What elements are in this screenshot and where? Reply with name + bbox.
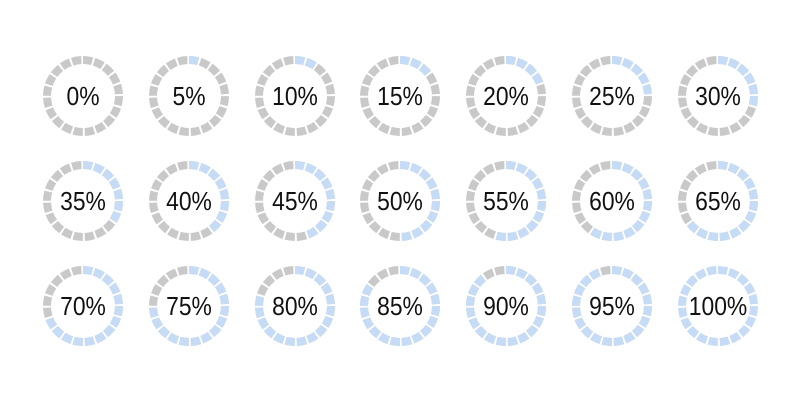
ring 100%	[682, 270, 754, 342]
ring 0%	[47, 60, 119, 132]
ring 80%	[259, 270, 331, 342]
ring 45%: 45%	[272, 188, 318, 216]
ring 50%	[364, 165, 436, 237]
ring 90%: 90%	[483, 293, 529, 321]
ring 65%	[682, 165, 754, 237]
ring 55%	[470, 165, 542, 237]
ring 20%: 20%	[483, 83, 529, 111]
ring 60%: 60%	[589, 188, 635, 216]
ring 95%	[576, 270, 648, 342]
ring 15%	[364, 60, 436, 132]
ring 85%: 85%	[377, 293, 423, 321]
ring 65%: 65%	[695, 188, 741, 216]
ring 60%	[576, 165, 648, 237]
ring 10%: 10%	[272, 83, 318, 111]
ring 10%	[259, 60, 331, 132]
ring 55%: 55%	[483, 188, 529, 216]
ring 25%	[576, 60, 648, 132]
ring 35%	[47, 165, 119, 237]
ring 45%	[259, 165, 331, 237]
ring 30%: 30%	[695, 83, 741, 111]
ring 30%	[682, 60, 754, 132]
ring 25%: 25%	[589, 83, 635, 111]
ring 70%	[47, 270, 119, 342]
ring 50%: 50%	[377, 188, 423, 216]
ring 90%	[470, 270, 542, 342]
ring 15%: 15%	[377, 83, 423, 111]
ring 70%: 70%	[60, 293, 106, 321]
ring 40%: 40%	[166, 188, 212, 216]
ring 40%	[153, 165, 225, 237]
ring 75%: 75%	[166, 293, 212, 321]
ring 35%: 35%	[60, 188, 106, 216]
ring 20%	[470, 60, 542, 132]
ring 75%	[153, 270, 225, 342]
ring 5%: 5%	[172, 83, 206, 111]
ring 5%	[153, 60, 225, 132]
ring 95%: 95%	[589, 293, 635, 321]
ring 0%: 0%	[66, 83, 100, 111]
ring 80%: 80%	[272, 293, 318, 321]
ring 100%: 100%	[689, 293, 747, 321]
ring 85%	[364, 270, 436, 342]
